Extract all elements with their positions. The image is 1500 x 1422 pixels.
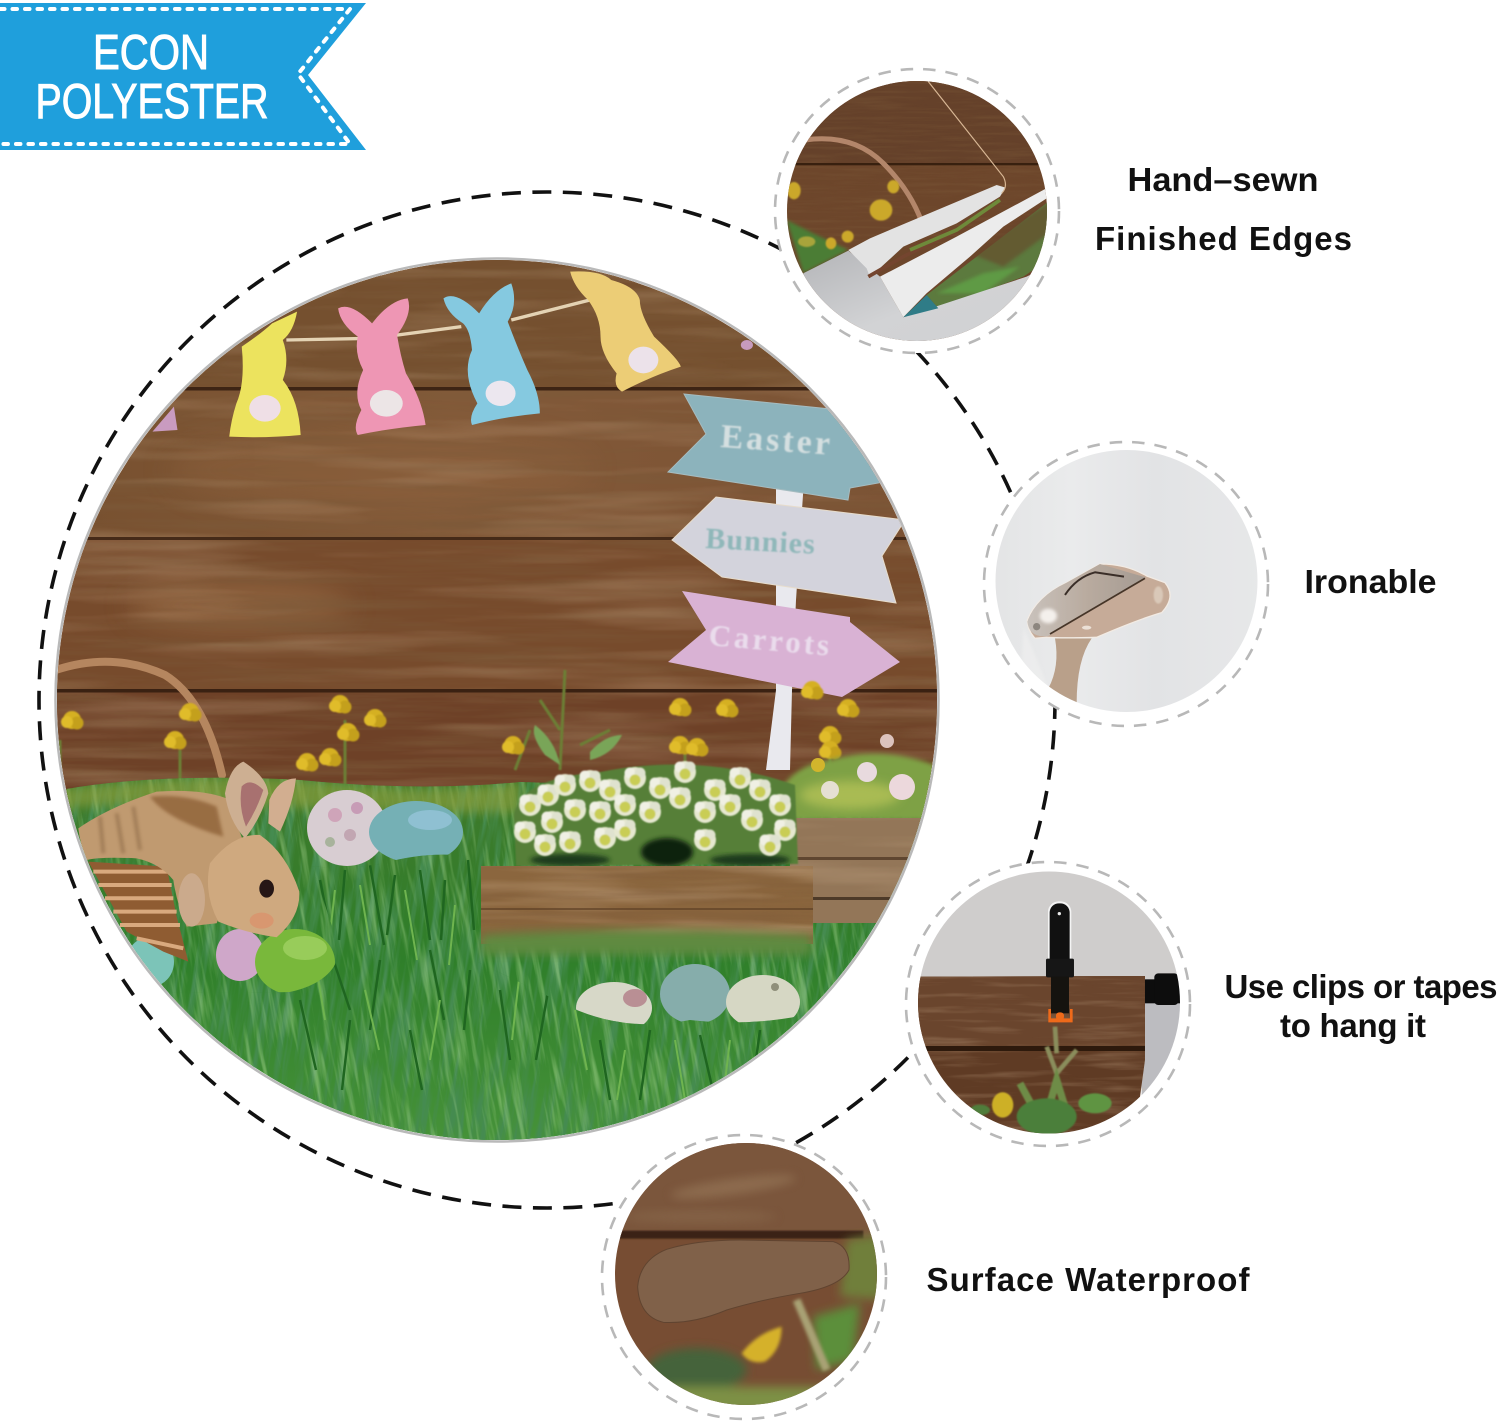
grass field	[66, 778, 926, 1140]
sign: carrots	[668, 591, 900, 697]
rabbit head	[208, 835, 299, 937]
sign: bunnies	[672, 497, 905, 603]
flower bed: pansies	[514, 761, 798, 866]
label: hand-sewn finished edges	[1095, 161, 1352, 257]
photo: folded hem	[783, 77, 1053, 353]
sign post	[766, 480, 804, 770]
bunny: yellow left	[229, 312, 301, 437]
wood wall background	[50, 255, 945, 820]
bunny: blue	[443, 283, 540, 425]
rabbit body	[78, 791, 247, 927]
badge: econ polyester ribbon	[0, 3, 366, 150]
dashed connector ring	[39, 192, 1055, 1208]
badge: econ polyester ribbon: POLYESTER	[36, 75, 268, 129]
sign: easter: Easter	[719, 418, 834, 463]
rabbit and basket	[78, 762, 299, 962]
main image circle: easter bunny scene	[54, 257, 940, 1143]
label: hand-sewn finished edges: Finished Edges	[1095, 220, 1352, 257]
feature: surface waterproof	[602, 1135, 886, 1419]
label: use clips or tapes to hang it: Use clips or tapes	[1224, 968, 1498, 1005]
feature: hand-sewn finished edges	[775, 69, 1059, 353]
right flower bed foliage	[775, 734, 935, 820]
basket body	[88, 862, 188, 962]
label: surface waterproof: Surface Waterproof	[926, 1261, 1250, 1298]
basket handle	[50, 662, 222, 775]
yellow flowers and stems	[58, 670, 860, 784]
badge: econ polyester ribbon: ECON	[93, 26, 209, 80]
feature: ironable	[984, 442, 1268, 726]
label: ironable: Ironable	[1304, 563, 1436, 600]
planter: front crate	[481, 866, 813, 955]
bunny: yellow right	[570, 271, 681, 392]
feature: use clips or tapes	[906, 862, 1190, 1146]
rabbit ears	[225, 762, 268, 838]
photo: steam iron	[990, 447, 1263, 720]
bunny: pink	[338, 298, 426, 435]
easter eggs	[126, 790, 800, 1034]
label: use clips or tapes to hang it	[1224, 968, 1498, 1044]
sign: carrots: Carrots	[707, 617, 834, 663]
photo: water droplet on fabric	[610, 1140, 883, 1413]
bunny garland	[152, 271, 753, 437]
label: use clips or tapes to hang it: to hang it	[1280, 1007, 1426, 1044]
planter: back right crate	[790, 818, 921, 923]
foreground grass over eggs	[169, 854, 804, 1140]
rabbit nose	[250, 913, 274, 929]
rabbit eye	[259, 880, 274, 898]
sign: bunnies: Bunnies	[705, 522, 817, 561]
label: hand-sewn finished edges: Hand–sewn	[1128, 161, 1318, 198]
sign: easter	[668, 394, 905, 500]
photo: clamp on backdrop	[913, 867, 1187, 1140]
